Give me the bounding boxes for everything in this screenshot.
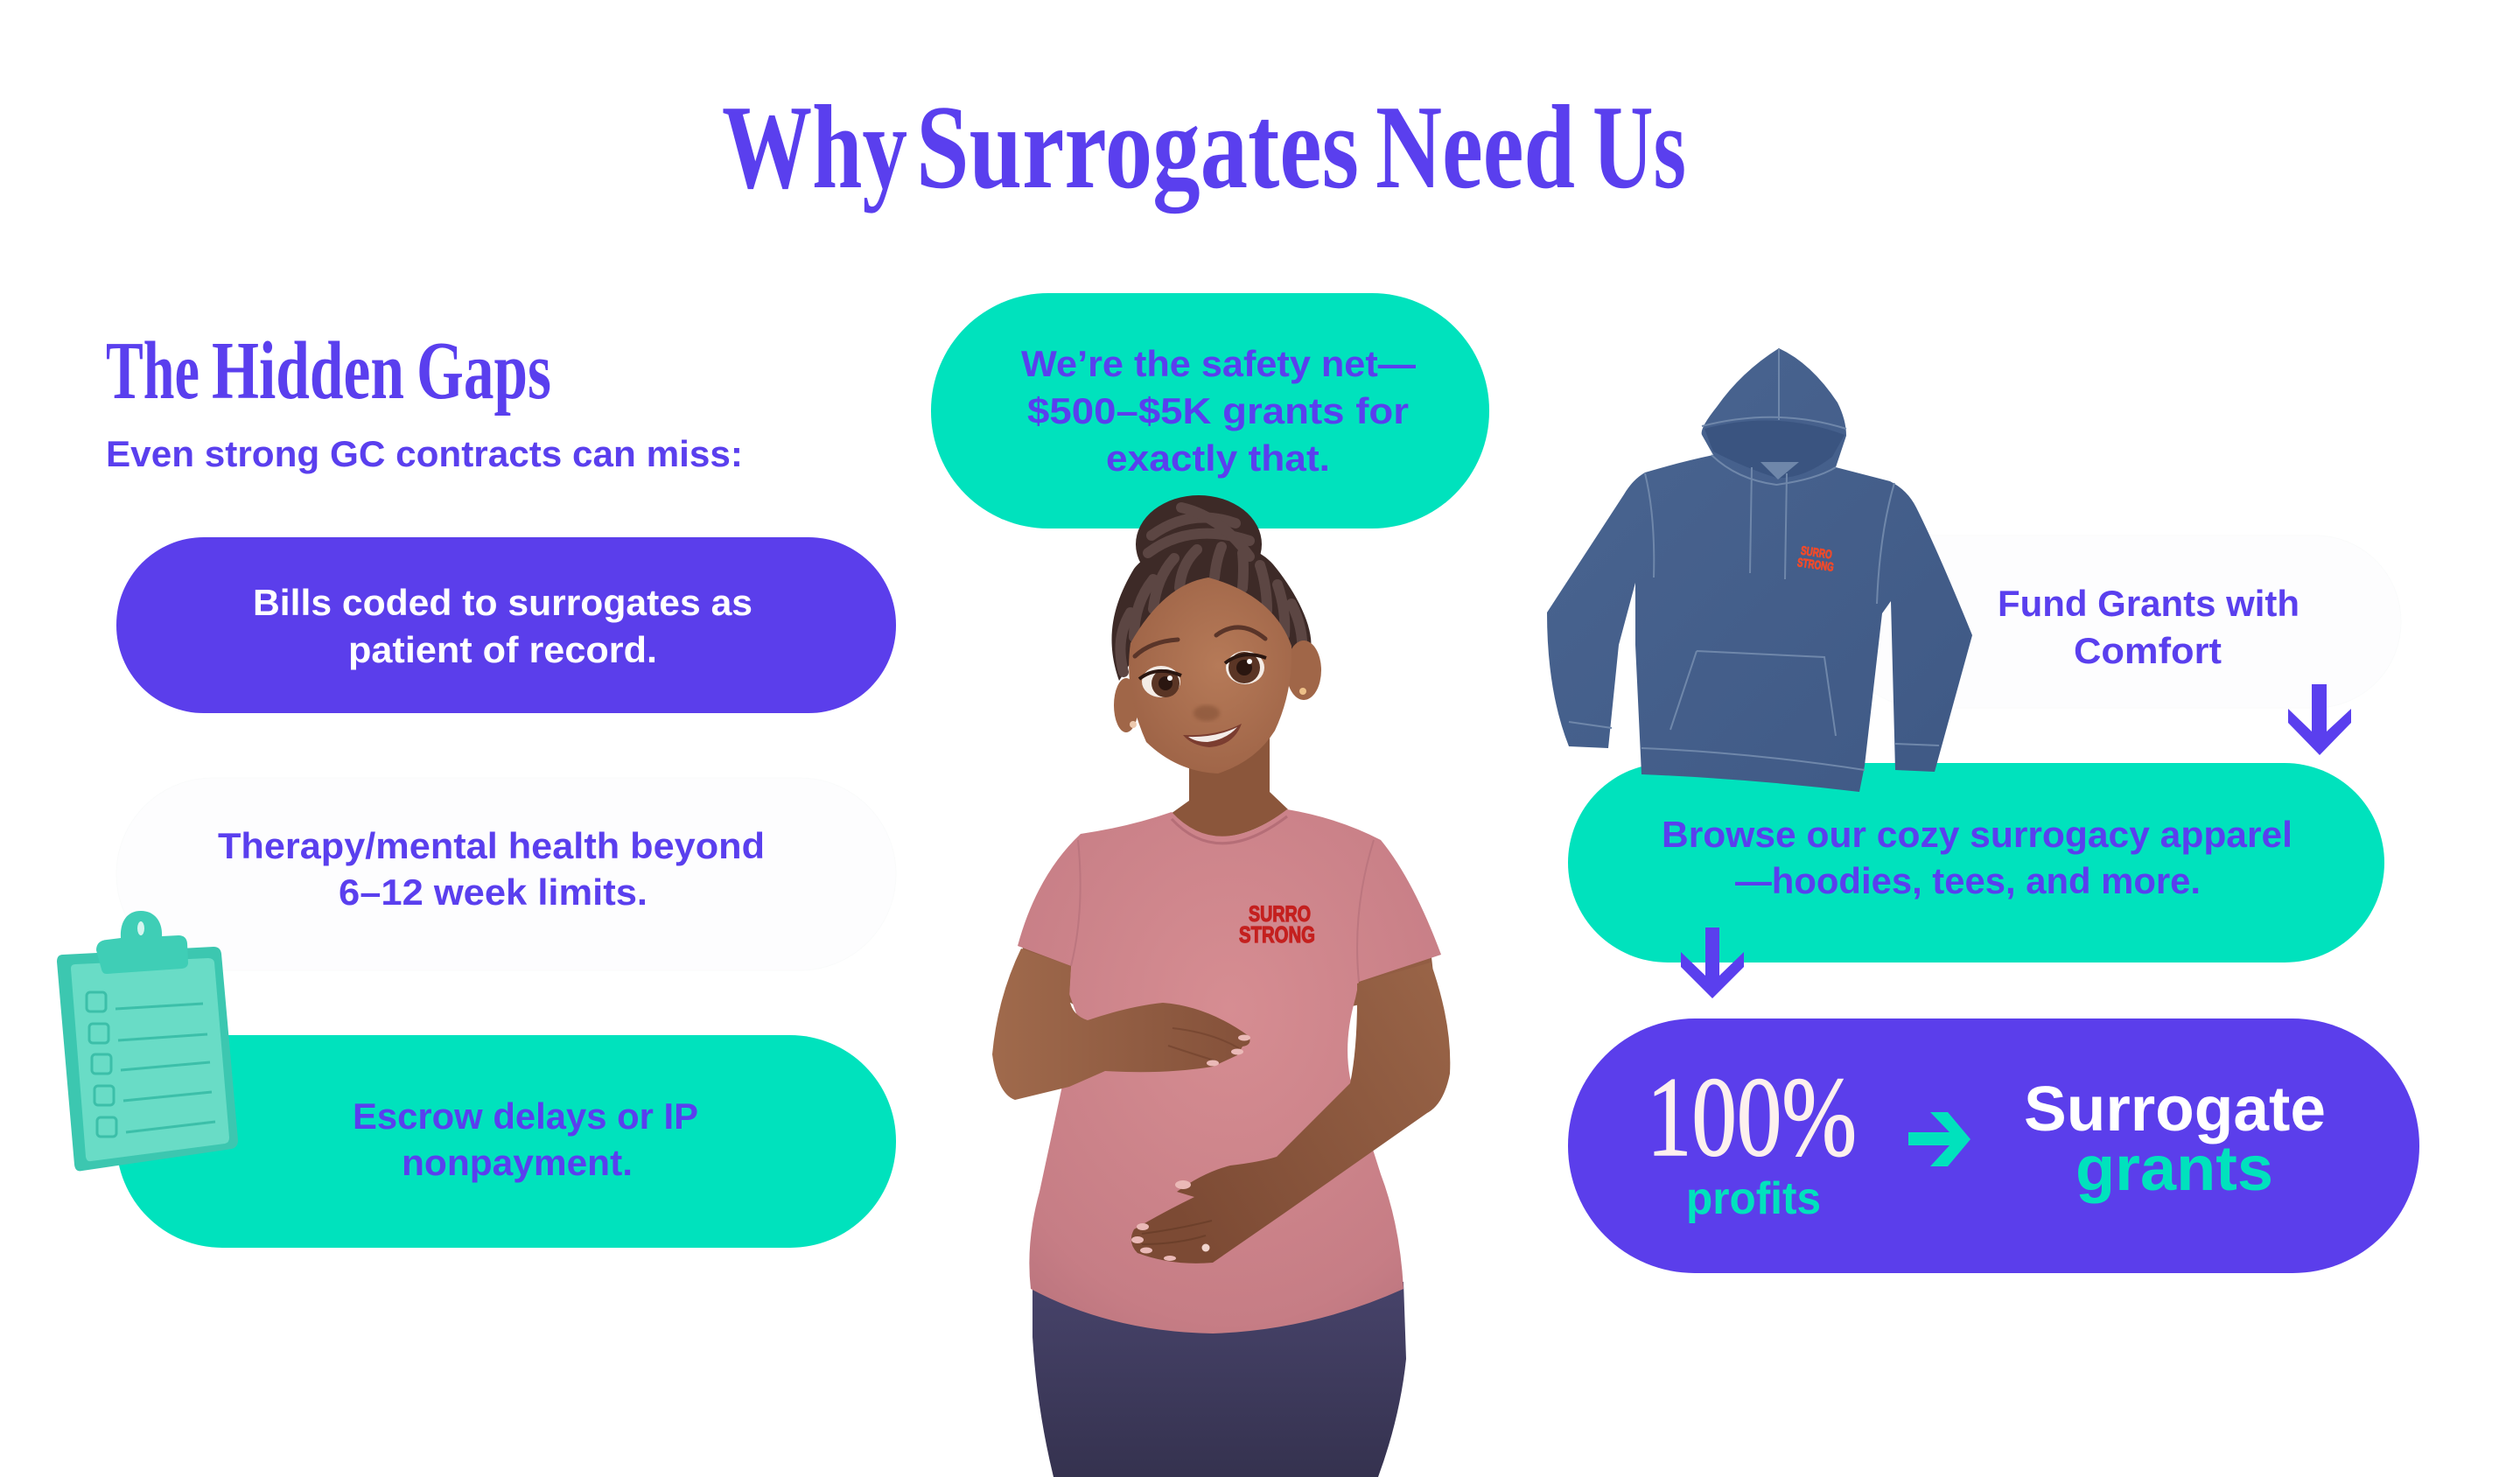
pill: bills coded (116, 537, 896, 713)
arrow: down to grants (1681, 928, 1744, 998)
hair and bun (1112, 495, 1312, 681)
arrow: down to apparel (2288, 684, 2351, 755)
heading: the hidden gaps (106, 326, 551, 416)
heading: the hidden gaps: The (106, 326, 200, 416)
subheading: Even strong GC contracts can miss: (106, 433, 743, 474)
label: profits: profits (1686, 1173, 1821, 1224)
panel: fund grants (1547, 348, 2419, 1273)
neck (1171, 735, 1288, 836)
callout: safety net: We’re the safety net— (1021, 343, 1416, 384)
shirt logo: STRONG (1239, 921, 1315, 948)
shirt logo: SURRO (1249, 902, 1311, 927)
callout: safety net: $500–$5K grants for (1027, 390, 1409, 431)
mouth (1183, 724, 1242, 747)
pill: escrow: nonpayment. (402, 1142, 633, 1183)
ears (1114, 640, 1321, 732)
title: Need (1376, 80, 1575, 214)
shirt (1018, 809, 1441, 1334)
panel: the hidden gaps (57, 326, 896, 1248)
pill: browse apparel: Browse our cozy surrogacy apparel (1662, 814, 2292, 855)
pill: fund grants with comfort (1838, 536, 2401, 708)
upper arms under sleeves (1019, 941, 1435, 1006)
label: grants: grants (2076, 1134, 2273, 1204)
right arm and hand (1131, 962, 1450, 1264)
pill: fund grants with comfort: Fund Grants with (1998, 583, 2300, 624)
pill: bills coded: patient of record. (348, 629, 657, 670)
nails and ring (1131, 1034, 1250, 1261)
hoodie logo: SURRO (1800, 543, 1833, 562)
heading: the hidden gaps: Hidden (212, 326, 404, 416)
title (722, 80, 1686, 214)
heading: the hidden gaps: Gaps (416, 326, 551, 416)
icon: clipboard (57, 911, 238, 1171)
callout: safety net: exactly that. (1106, 438, 1330, 479)
pants (1032, 1282, 1406, 1477)
pill: escrow: Escrow delays or IP (353, 1096, 698, 1137)
pill: therapy (116, 778, 896, 970)
illustration: pregnant surrogate (992, 495, 1450, 1477)
pill: fund grants with comfort: Comfort (2074, 630, 2222, 671)
label: surrogate: Surrogate (2024, 1074, 2326, 1144)
callout: safety net (931, 293, 1489, 528)
left arm and hand (992, 948, 1250, 1100)
arrow: right (1908, 1112, 1970, 1166)
title: Why (722, 80, 907, 214)
pill: bills coded: Bills coded to surrogates as (253, 582, 752, 623)
pill: browse apparel: —hoodies, tees, and more. (1735, 860, 2201, 901)
pill: browse apparel (1568, 763, 2384, 962)
pill: profits to grants (1568, 1018, 2419, 1273)
title: Us (1592, 80, 1686, 214)
hoodie logo (1796, 542, 1837, 574)
shirt logo (1239, 902, 1315, 948)
title: Surrogates (916, 80, 1359, 214)
icon: hoodie (1547, 348, 1972, 792)
pill: therapy: Therapy/mental health beyond (218, 825, 765, 866)
pill: escrow (116, 1035, 896, 1248)
face (1129, 578, 1292, 774)
eyes (1139, 651, 1266, 697)
eyebrows (1135, 627, 1265, 656)
hoodie logo: STRONG (1796, 555, 1835, 574)
nose (1194, 705, 1220, 721)
pill: therapy: 6–12 week limits. (339, 872, 648, 913)
stat: 100 percent: 100% (1647, 1054, 1857, 1180)
